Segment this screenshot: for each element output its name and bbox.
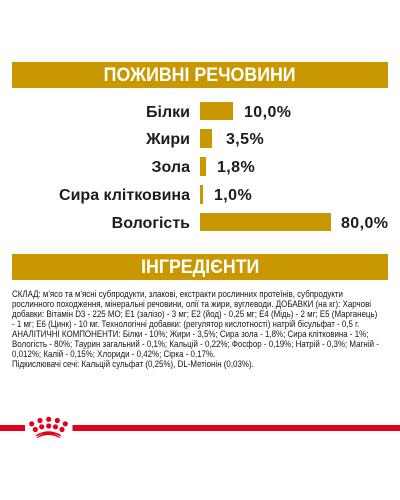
text block: ingredients: 0,012%; Калій - 0,15%; Хлориди - 0,42%; Сірка - 0,17%.: [12, 349, 215, 359]
heading: nutrients banner: [12, 62, 388, 88]
bar: fat: [200, 129, 212, 148]
bar: protein: [200, 102, 233, 120]
text block: ingredients: Підкислювачі сечі: Кальцій сульфат (0,25%), DL-Метіонін (0,03%).: [12, 359, 254, 369]
value: ash: 1,8%: [217, 158, 255, 176]
text block: ingredients: рослинного походження, мінеральні речовини, олії та жири, вуглеводи. ДОБАВКИ (на кг): Харчові: [12, 299, 371, 309]
label: fibre: Сира клітковина: [59, 186, 190, 204]
text block: ingredients: [12, 289, 379, 369]
text block: ingredients: СКЛАД: м'ясо та м'ясні субпродукти, злакові, екстракти рослинних протеїнів, субпродукти: [12, 289, 343, 299]
text block: ingredients: добавки: Вітамін D3 - 225 МО; E1 (залізо) - 3 мг; E2 (йод) - 0,25 мг; E4 (Мідь) - 2 мг; E5 (Марганець): [12, 309, 377, 319]
text block: ingredients: АНАЛІТИЧНІ КОМПОНЕНТИ: Білки - 10%; Жири - 3,5%; Сира зола - 1,8%; Сира клітковина - 1%;: [12, 329, 368, 339]
heading: nutrients banner: ПОЖИВНІ РЕЧОВИНИ: [104, 65, 296, 86]
bar chart: nutrients: [59, 102, 388, 232]
heading: ingredients banner: [12, 254, 388, 280]
value: moisture: 80,0%: [341, 214, 388, 232]
label: fat: Жири: [146, 131, 190, 148]
text block: ingredients: Вологість - 80%; Таурин загальний - 0,1%; Кальцій - 0,22%; Фосфор - 0,19%; Натрій - 0,3%; Магній -: [12, 339, 379, 349]
bar: moisture: [200, 213, 331, 231]
text block: ingredients: - 1 мг; E6 (Цинк) - 10 мг. Технологічні добавки: (регулятор кислотності) натрій бісульфат - 0,5 г.: [12, 319, 359, 329]
bar: fibre: [200, 185, 203, 204]
label: protein: Білки: [146, 104, 190, 120]
label: ash: Зола: [152, 158, 190, 176]
icon: crown: [29, 417, 68, 438]
bar: ash: [200, 157, 206, 176]
value: fat: 3,5%: [226, 131, 264, 148]
label: moisture: Вологість: [112, 214, 190, 232]
heading: ingredients banner: ІНГРЕДІЄНТИ: [141, 256, 259, 278]
value: protein: 10,0%: [244, 104, 291, 120]
logo: red line with crown: [0, 416, 400, 438]
value: fibre: 1,0%: [214, 186, 252, 204]
